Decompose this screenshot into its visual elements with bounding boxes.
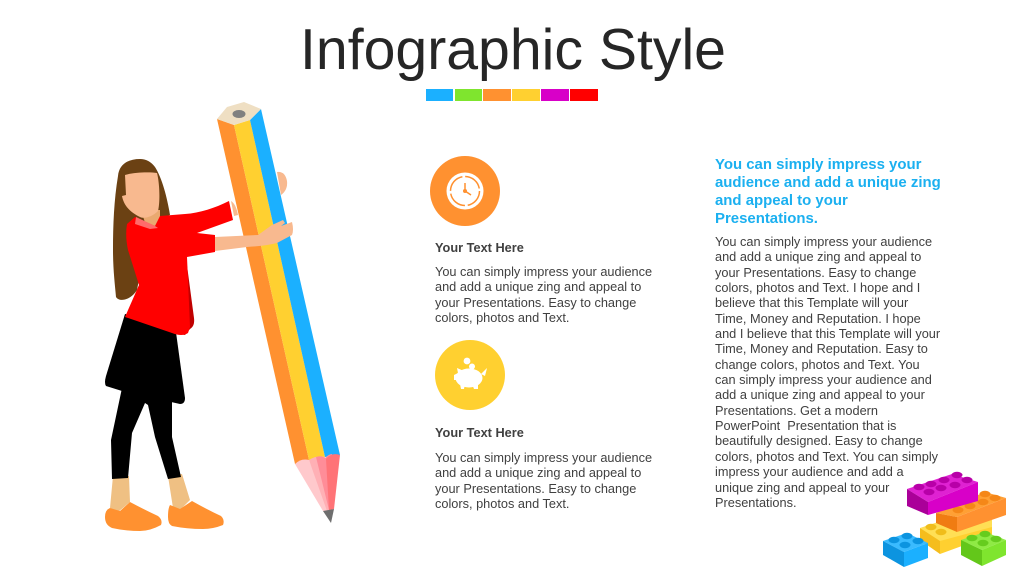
right text block: unique zing and appeal to your xyxy=(715,480,889,494)
right text block: Presentations. xyxy=(715,495,797,510)
right heading: Presentations. xyxy=(715,210,818,227)
text block 1 xyxy=(435,264,652,325)
orange brick xyxy=(936,491,1006,532)
icon: hand behind pencil xyxy=(277,172,287,195)
right heading: audience and add a unique zing xyxy=(715,174,941,191)
illustration: woman xyxy=(105,159,293,531)
back arm skin xyxy=(231,201,238,216)
text block 2 xyxy=(435,450,652,511)
right heading xyxy=(715,156,941,227)
right text block: colors, photos and Text. I hope and I xyxy=(715,280,920,295)
right text block: believe that this Template will your xyxy=(715,295,908,310)
neck xyxy=(141,210,160,229)
text block 1: colors, photos and Text. xyxy=(435,310,569,325)
title: Infographic Style xyxy=(300,18,726,82)
icon: piggy bank circle xyxy=(435,340,505,410)
right text block: Presentations. Get a modern xyxy=(715,403,878,418)
right text block: add a unique zing and appeal to your xyxy=(715,387,925,402)
green brick xyxy=(961,531,1006,566)
text block 2: and add a unique zing and appeal to xyxy=(435,465,641,480)
colour bar xyxy=(426,89,598,101)
right heading: and appeal to your xyxy=(715,192,848,209)
text block 1: your Presentations. Easy to change xyxy=(435,295,636,310)
right text block: change colors, photos and Text. You xyxy=(715,357,920,372)
leggings xyxy=(111,388,181,479)
yellow brick xyxy=(920,518,992,554)
shirt shadow xyxy=(175,258,194,335)
collar xyxy=(135,217,158,229)
shoes xyxy=(105,501,224,531)
right text block: Time, Money and Reputation. Easy to xyxy=(715,341,928,356)
right text block: can simply impress your audience and xyxy=(715,372,932,387)
text block 1: You can simply impress your audience xyxy=(435,264,652,279)
icon: clock circle xyxy=(430,156,500,226)
text block 2: your Presentations. Easy to change xyxy=(435,481,636,496)
text block 2: You can simply impress your audience xyxy=(435,450,652,465)
shirt xyxy=(125,201,233,335)
icon: lego bricks xyxy=(883,472,1006,567)
right text block: impress your audience and add a xyxy=(715,464,904,479)
icon: pencil xyxy=(217,102,340,523)
text block 2: colors, photos and Text. xyxy=(435,496,569,511)
right text block: You can simply impress your audience xyxy=(715,234,932,249)
magenta brick xyxy=(907,472,978,515)
ankles xyxy=(110,474,190,512)
right text block: beautifully designed. Easy to change xyxy=(715,433,923,448)
hair xyxy=(113,159,170,300)
subheading 1: Your Text Here xyxy=(435,240,524,255)
right text block: and add a unique zing and appeal to xyxy=(715,249,921,264)
right text block: PowerPoint Presentation that is xyxy=(715,418,896,433)
subheading 2: Your Text Here xyxy=(435,425,524,440)
face xyxy=(122,172,159,218)
right text block: your Presentations. Easy to change xyxy=(715,265,916,280)
right text block: and I believe that this Template will your xyxy=(715,326,940,341)
right text block: Time, Money and Reputation. I hope xyxy=(715,311,921,326)
front arm xyxy=(215,220,293,251)
right heading: You can simply impress your xyxy=(715,156,921,173)
right text block: colors, photos and Text. You can simply xyxy=(715,449,938,464)
text block 1: and add a unique zing and appeal to xyxy=(435,279,641,294)
right text block xyxy=(715,234,940,510)
skirt xyxy=(105,314,185,404)
blue brick xyxy=(883,533,928,567)
